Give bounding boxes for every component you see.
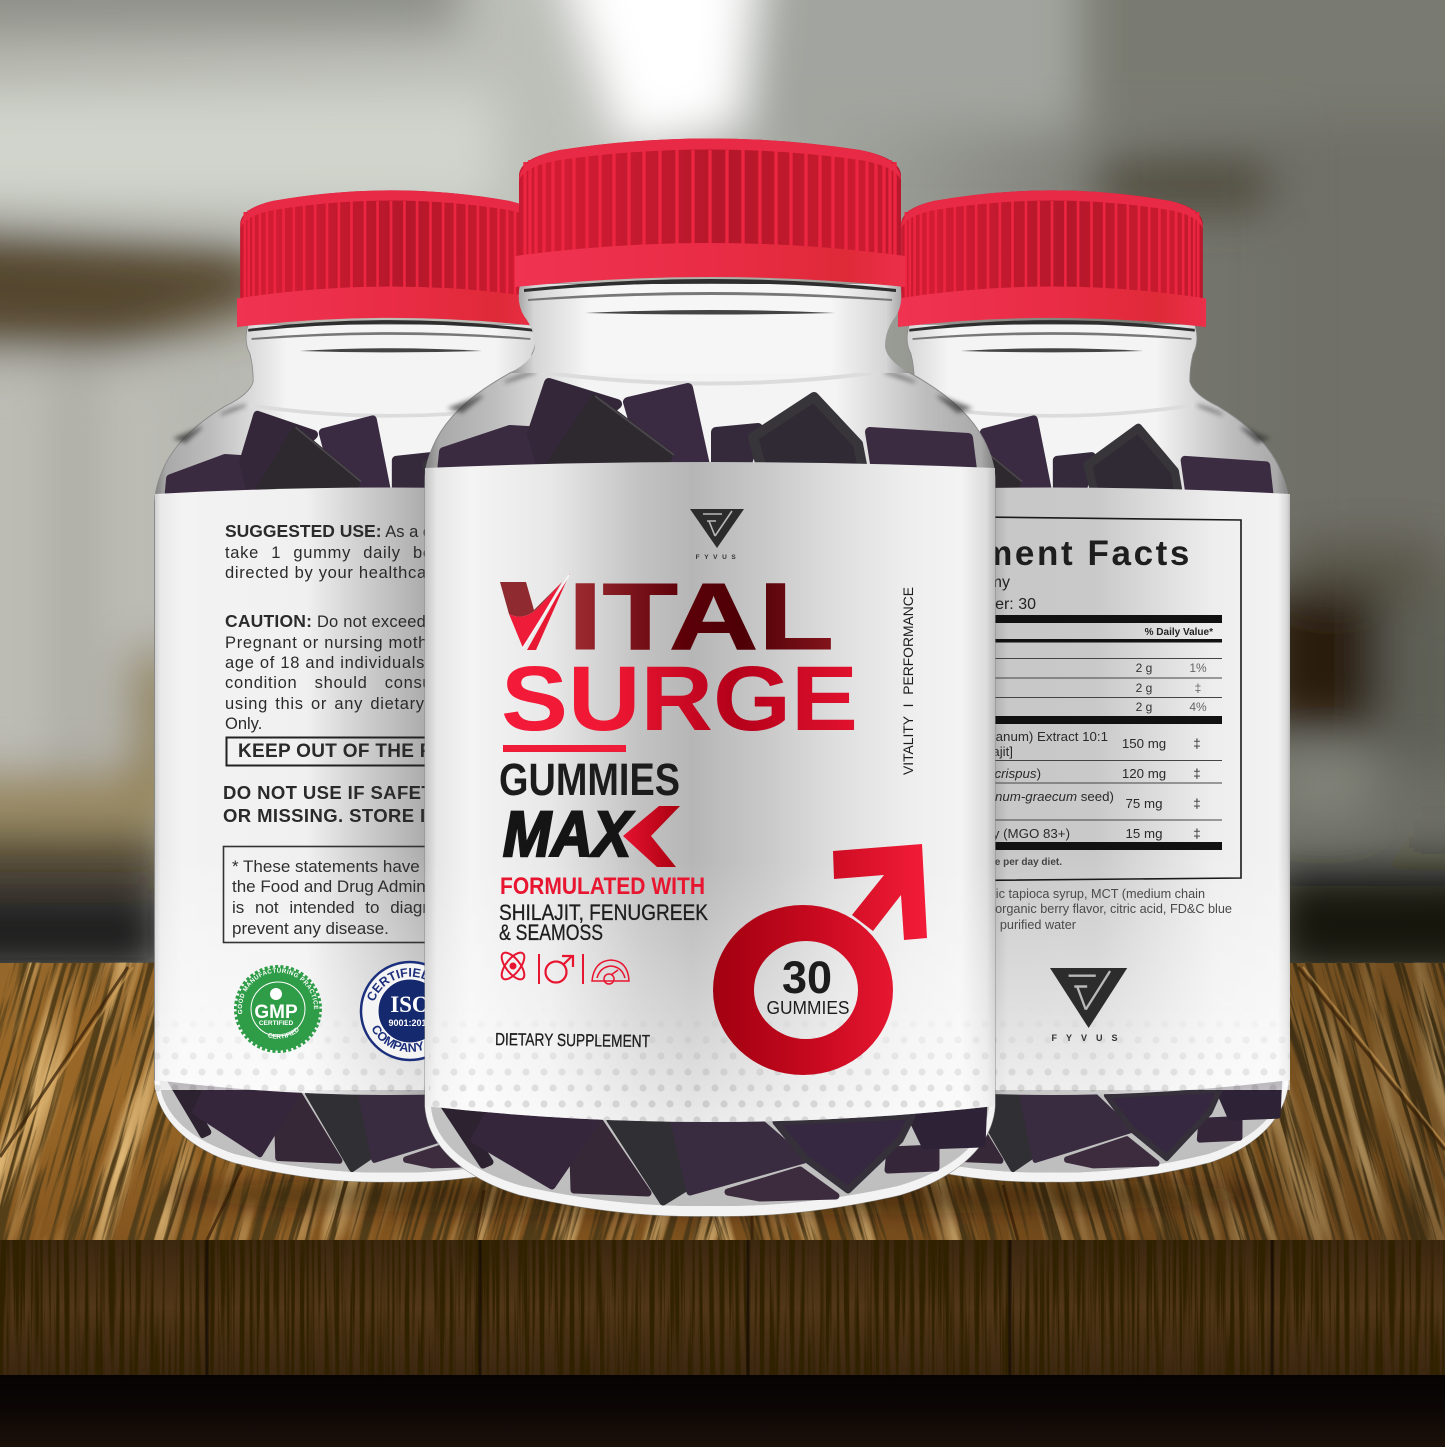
ingredient rows: 150 mg <box>1122 736 1166 751</box>
ingredient rows: 120 mg <box>1122 766 1166 781</box>
other ingredients: Other Ingredients: Organic tapioca syrup, MCT (medium chain <box>855 887 1205 901</box>
red rule <box>503 745 626 752</box>
pill count <box>766 952 850 1018</box>
ingredient rows: 15 mg <box>1126 826 1162 841</box>
icon: atom <box>498 949 528 983</box>
supplement facts heading: Supplement Facts <box>849 534 1192 573</box>
nutrition rows: 4% <box>1189 700 1207 714</box>
supplement facts box <box>767 515 1241 882</box>
gummies heading: GUMMIES <box>499 754 680 805</box>
ingredient rows: [Shilajit] <box>966 744 1013 759</box>
ingredient rows: Shilajit (Asphaltum punjabianum) Extract 10:1 <box>839 729 1108 744</box>
key ingredients: SHILAJIT, FENUGREEK <box>499 900 708 925</box>
caution text: age of 18 and individuals with a known medical <box>225 654 601 672</box>
table rules <box>800 615 1222 850</box>
ingredient rows: Fenugreek (Trigonella foenum-graecum seed) <box>844 789 1114 804</box>
serving information: Serving Size: 1 Gummy <box>842 574 1010 591</box>
ISO certified badge: 9001:2015 <box>388 1018 432 1028</box>
nutrition rows <box>1136 661 1207 714</box>
GMP certified badge <box>234 965 322 1053</box>
front bottle <box>425 138 995 1216</box>
supplement facts box: % Daily Value* <box>1145 627 1213 638</box>
disclaimer box: the Food and Drug Administration. This product <box>232 877 588 896</box>
disclaimer box: * These statements have not been evaluated by <box>232 857 592 876</box>
icon: divider bars <box>539 954 583 984</box>
ISO certified badge: ISO <box>390 992 430 1017</box>
back right bottle <box>767 190 1290 1182</box>
ingredient rows: Manuka Honey (MGO 83+) <box>910 826 1070 841</box>
disclaimer box: prevent any disease. <box>232 919 389 938</box>
right bottle brand logo: FYVUS <box>1051 1033 1127 1043</box>
ingredient rows: ‡ <box>1193 766 1201 781</box>
icon: male symbol <box>546 956 573 982</box>
brand logo <box>690 509 744 561</box>
dietary supplement: DIETARY SUPPLEMENT <box>495 1029 650 1051</box>
serving information: Servings Per Container: 30 <box>844 596 1036 613</box>
ingredient rows: ‡ <box>1193 796 1201 811</box>
caution text: Pregnant or nursing mothers, children under the <box>225 634 608 652</box>
caution text: CAUTION: Do not exceed recommended dose. <box>225 611 585 631</box>
nutrition rows: ‡ <box>1195 681 1201 695</box>
max wordmark: MAX <box>503 798 634 870</box>
caution text: Only. <box>225 715 262 733</box>
left bottle label <box>155 488 627 1095</box>
suggested use text: directed by your healthcare professional. <box>225 564 551 582</box>
pill count: 30 <box>782 952 832 1003</box>
right bottle label <box>814 488 1290 1095</box>
blurred room background <box>0 0 1445 980</box>
nutrition rows: 1% <box>1189 661 1207 675</box>
disclaimer box: is not intended to diagnose, treat, cure or <box>232 898 583 917</box>
other ingredients: and red, purified water <box>950 918 1077 932</box>
product name: surge: SURGE <box>501 648 858 750</box>
wooden table <box>0 963 1445 1447</box>
safety warning: OR MISSING. STORE IN A COOL, DRY PLACE. <box>223 805 644 826</box>
key ingredients: & SEAMOSS <box>499 920 603 945</box>
suggested use text: SUGGESTED USE: As a dietary supplement, <box>225 521 567 541</box>
ISO certified badge: COMPANY <box>372 1026 423 1052</box>
ingredient rows: ] <box>992 804 996 819</box>
GMP certified badge: CERTIFIED <box>259 1020 293 1027</box>
GMP certified badge: GOOD MANUFACTURING PRACTICE <box>238 968 318 1014</box>
suggested use text <box>225 521 596 582</box>
front bottle cap <box>515 138 905 287</box>
formulated with: FORMULATED WITH <box>500 873 705 900</box>
other ingredients <box>855 887 1232 932</box>
safety warning: DO NOT USE IF SAFETY SEAL IS DAMAGED <box>223 782 629 803</box>
right bottle brand logo <box>1050 968 1127 1043</box>
back left bottle <box>154 150 684 1216</box>
caution text: condition should consult a physician before <box>225 674 630 692</box>
GMP certified badge: GMP <box>254 1002 298 1023</box>
nutrition rows: 2 g <box>1136 661 1152 675</box>
front bottle neck <box>510 279 910 373</box>
right bottle cap <box>898 190 1206 327</box>
vertical tagline: VITALITY I PERFORMANCE <box>900 587 916 775</box>
brand logo: FYVUS <box>696 554 740 561</box>
male symbol badge <box>713 844 927 1075</box>
safety warning <box>223 782 644 826</box>
product name: vital <box>500 564 834 670</box>
front bottle label <box>425 462 995 1122</box>
caution text: using this or any dietary supplement. For Adults <box>225 695 620 713</box>
right label fade and dot band <box>990 850 1290 1092</box>
product name: vital: ITAL <box>568 564 834 670</box>
ingredient rows: 75 mg <box>1126 796 1162 811</box>
serving information <box>842 574 1036 613</box>
ingredient rows: ‡ <box>1193 736 1201 751</box>
suggested use text: take 1 gummy daily before a meal or as <box>225 544 596 562</box>
left bottle cap <box>237 190 545 327</box>
keep out of reach box: KEEP OUT OF THE REACH OF CHILDREN <box>238 741 628 762</box>
ingredient rows: ‡ <box>1193 826 1201 841</box>
ingredient rows: Sea Moss (Chondrus crispus) <box>866 766 1041 781</box>
caution text <box>225 611 630 733</box>
GMP certified badge: CERTIFIED <box>268 1028 299 1039</box>
nutrition rows: 2 g <box>1136 681 1152 695</box>
supplement facts box: Percent Daily Values are based on a 2,000 calorie per day diet. <box>767 857 1062 868</box>
left label fade and dot band <box>155 850 430 1092</box>
icon: gauge <box>592 960 629 984</box>
ISO certified badge <box>360 960 432 1062</box>
disclaimer box <box>224 846 592 942</box>
ingredient rows <box>839 729 1201 841</box>
front label fade and dot band <box>425 907 995 1122</box>
key ingredients <box>499 900 708 945</box>
nutrition rows: 2 g <box>1136 700 1152 714</box>
ISO certified badge: CERTIFIED <box>368 968 424 1000</box>
pill count: GUMMIES <box>766 998 850 1018</box>
other ingredients: triglycerides), organic berry flavor, citric acid, FD&C blue <box>916 902 1232 916</box>
